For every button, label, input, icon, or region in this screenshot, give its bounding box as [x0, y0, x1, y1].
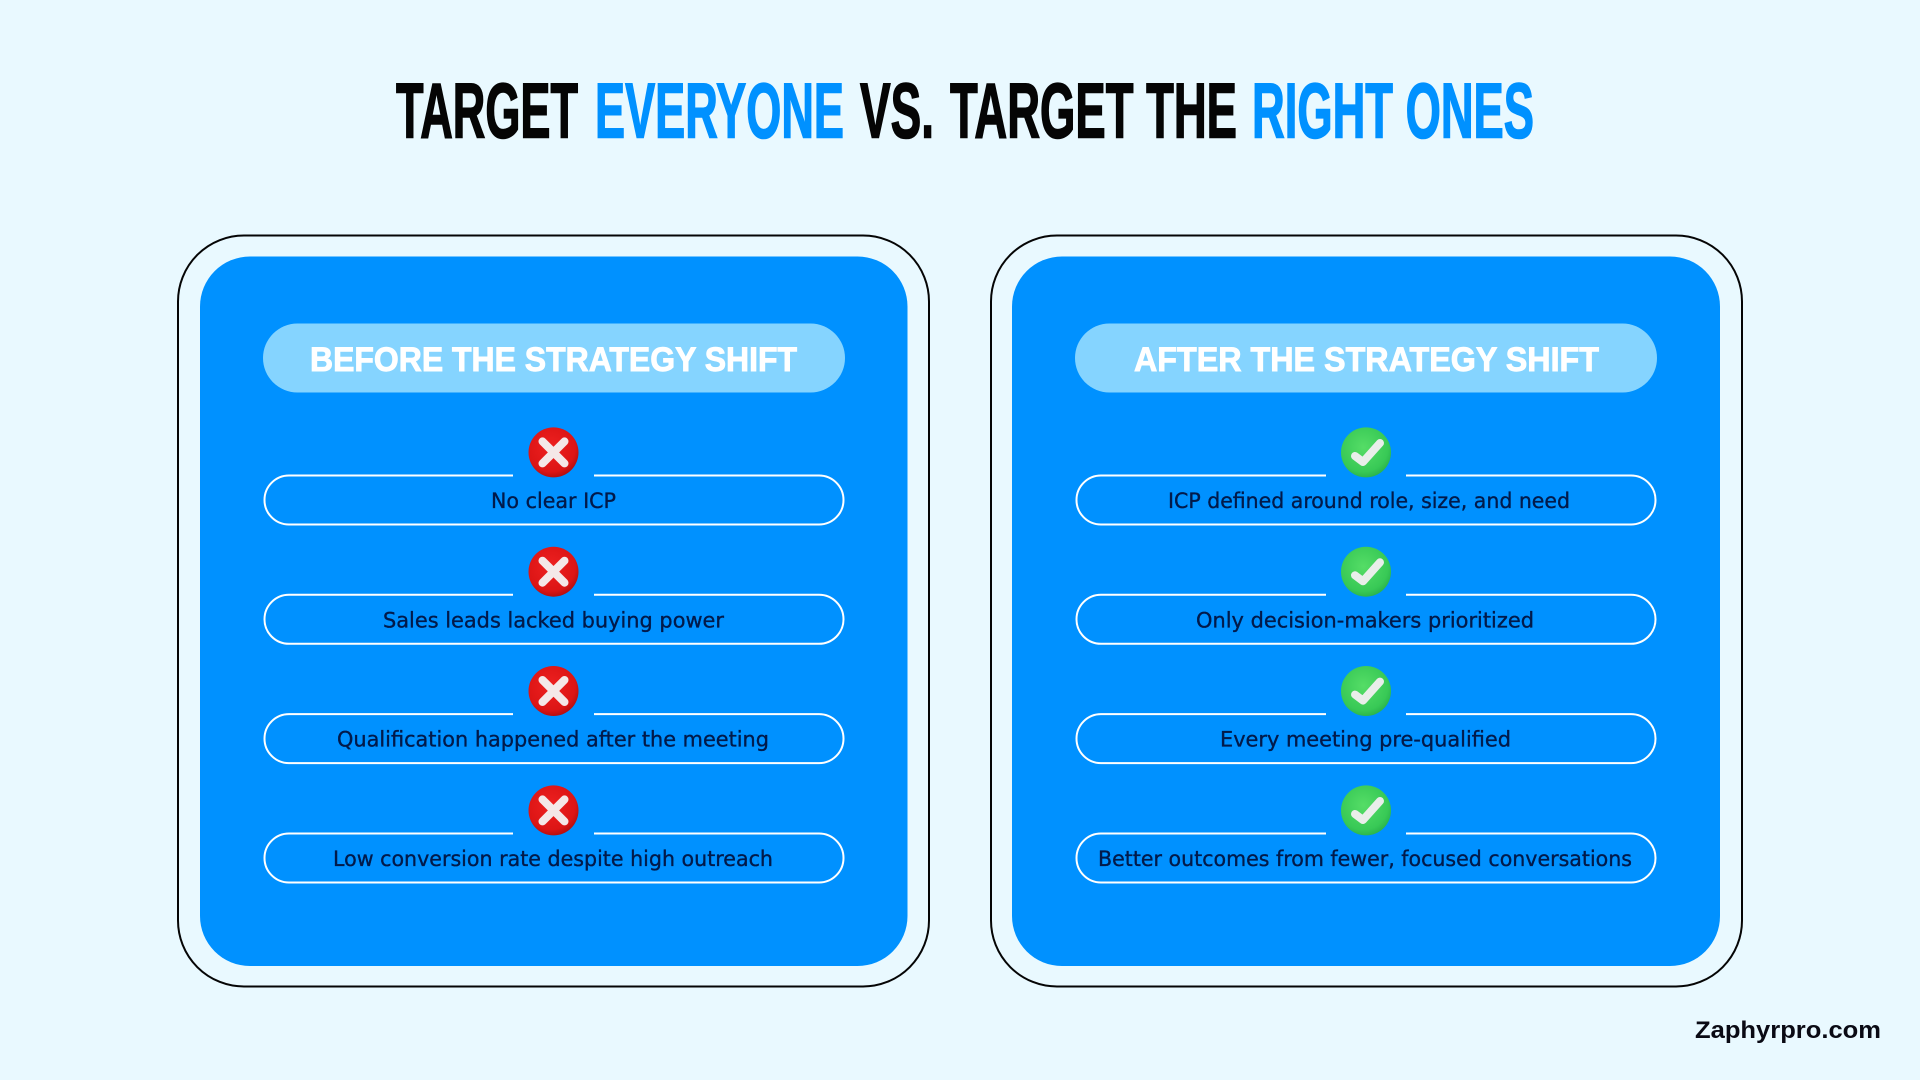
row: better outcomes: Better outcomes from fewer, focused conversations [1098, 847, 1632, 871]
row: qualification happened after the meeting: Qualification happened after the meeting [337, 728, 769, 752]
heading pill: after: AFTER THE STRATEGY SHIFT [1134, 341, 1599, 379]
row: sales leads lacked buying power: Sales leads lacked buying power [383, 608, 724, 632]
brand footer: Zaphyrpro.com [1695, 1017, 1881, 1044]
heading pill: after [1075, 324, 1657, 392]
title: TARGET [396, 66, 578, 154]
title: TARGET THE [950, 66, 1237, 154]
title: RIGHT ONES [1252, 66, 1534, 154]
heading pill: before: BEFORE THE STRATEGY SHIFT [310, 341, 797, 379]
panel outline [178, 236, 929, 986]
row: ICP defined: ICP defined around role, size, and need [1168, 489, 1570, 513]
title: EVERYONE [595, 66, 844, 154]
panel fill [1012, 256, 1720, 966]
heading pill: before [263, 324, 845, 392]
row: only decision-makers prioritized [1076, 547, 1656, 644]
panel outline [991, 236, 1742, 986]
row: better outcomes [1076, 785, 1656, 882]
panel: after the strategy shift [991, 236, 1742, 986]
row: ICP defined [1076, 427, 1656, 524]
row: every meeting pre-qualified: Every meeting pre-qualified [1220, 728, 1511, 752]
row: no clear ICP [264, 427, 843, 524]
panel: before the strategy shift [178, 236, 929, 986]
row: only decision-makers prioritized: Only decision-makers prioritized [1196, 608, 1534, 632]
title [396, 66, 1534, 154]
row: low conversion rate despite high outreach: Low conversion rate despite high outreach [333, 847, 773, 871]
panel fill [200, 256, 908, 966]
row: no clear ICP: No clear ICP [491, 489, 616, 513]
row: low conversion rate despite high outreach [264, 785, 843, 882]
title: VS. [860, 66, 934, 154]
row: sales leads lacked buying power [264, 547, 843, 644]
row: qualification happened after the meeting [264, 666, 843, 763]
row: every meeting pre-qualified [1076, 666, 1656, 763]
